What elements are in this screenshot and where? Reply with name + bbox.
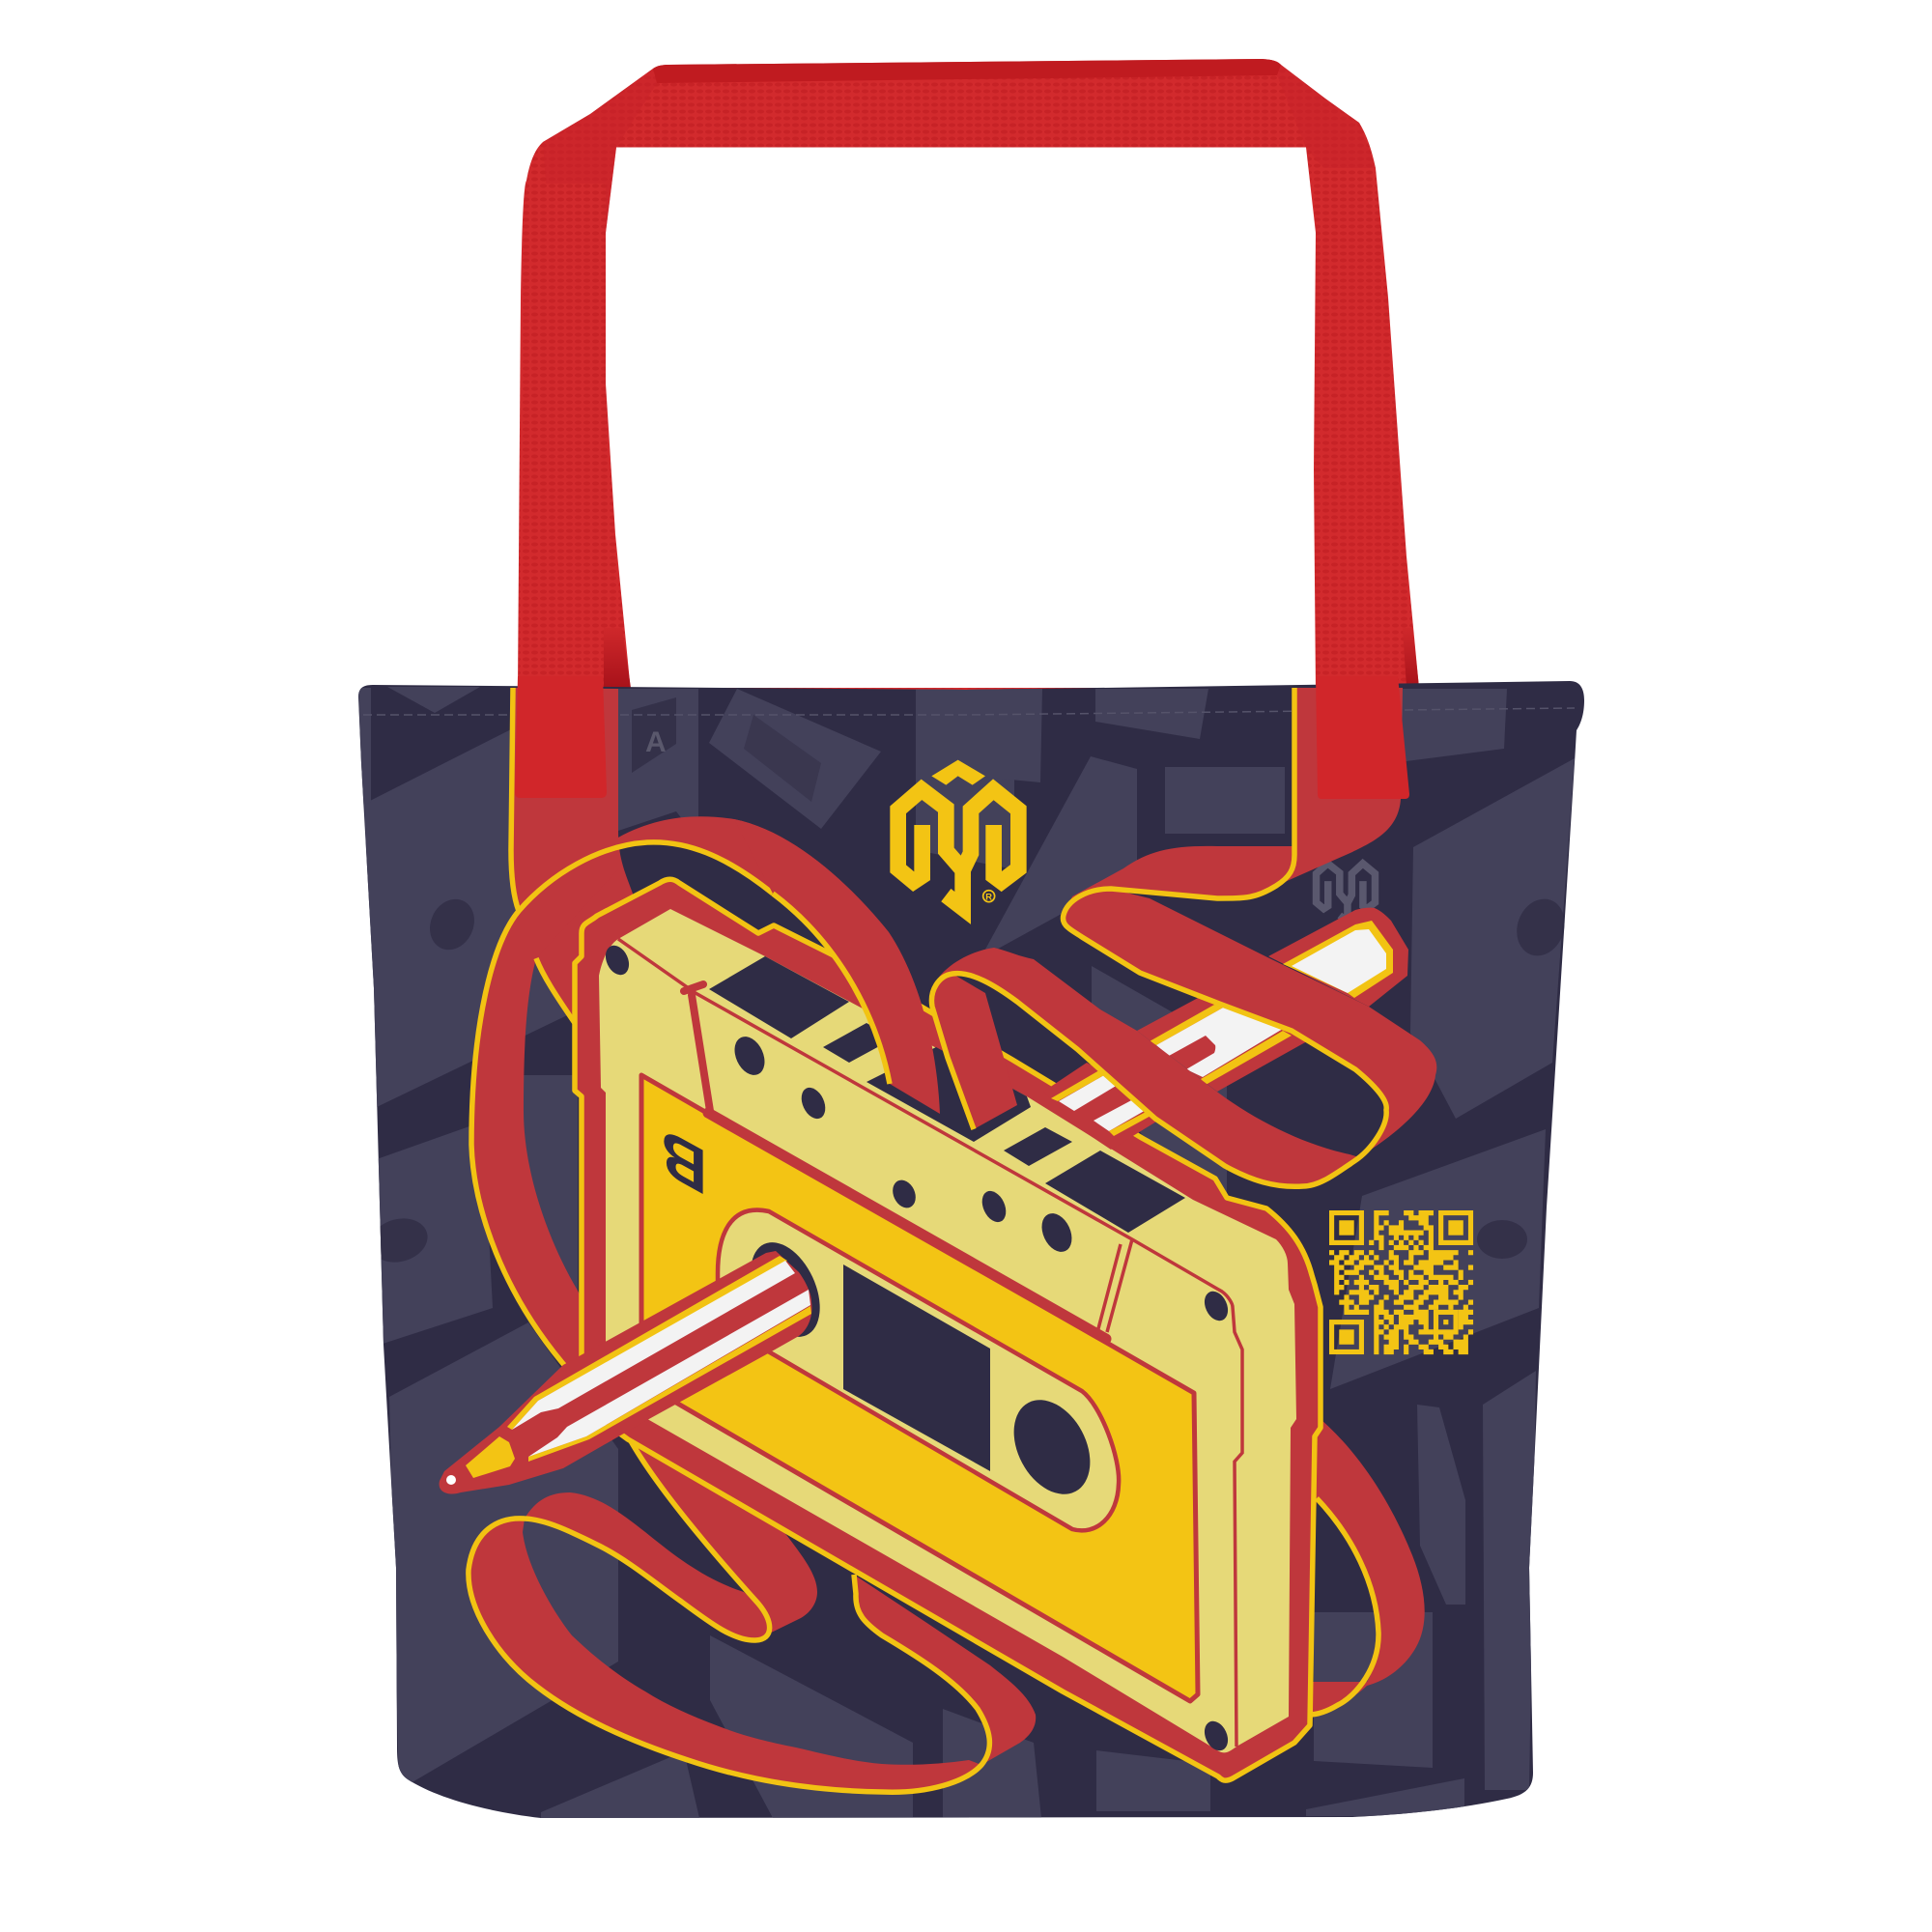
- inner strip into cassette: [931, 974, 1017, 1129]
- registered mark: R: [985, 892, 992, 901]
- yellow ribbon edge: [931, 688, 1386, 1186]
- tape viewing window: [843, 1264, 990, 1471]
- QR finder patterns: [1332, 1213, 1470, 1351]
- tape: yellow edges on left loop: [471, 688, 773, 1372]
- cassette inner red lines: [618, 939, 1242, 1747]
- right reel hole: [999, 1387, 1105, 1507]
- pencil tip: [466, 1436, 515, 1478]
- pencil point: [446, 1475, 456, 1485]
- label thick top edge: [708, 1113, 1106, 1339]
- pencil upper stripe: [507, 1256, 787, 1430]
- pencil end: [1268, 908, 1408, 1007]
- QR code: [1329, 1213, 1473, 1351]
- tape: yellow edges on lower bands: [469, 1439, 989, 1792]
- top windows: [709, 956, 1185, 1233]
- label window plate: [718, 1210, 1119, 1530]
- cassette notch left: [684, 984, 710, 1111]
- infographic: cassette tote bag: [358, 59, 1584, 1818]
- registered mark: [983, 891, 995, 902]
- cassette tape: [575, 879, 1321, 1780]
- tape: lower fold piece: [630, 1436, 817, 1640]
- QR data modules: [1329, 1213, 1473, 1351]
- diagonal band: [1064, 889, 1436, 1157]
- tape: arch passing in front of cassette: [734, 819, 940, 1114]
- cassette yellow label: [641, 1075, 1198, 1701]
- tape: lower right band: [854, 1575, 1036, 1765]
- pencil middle section: [1137, 997, 1307, 1092]
- tape: left strap: [511, 688, 676, 1063]
- cassette notch right: [1096, 1239, 1132, 1336]
- top hem stitching: [363, 708, 1575, 715]
- right tab: [1316, 676, 1409, 799]
- strap tabs stitched on bag: [515, 676, 1409, 799]
- tape: lower big band: [469, 1519, 981, 1792]
- QR finder centres: [1339, 1220, 1463, 1345]
- tape: large left loop and arch: [471, 816, 940, 1372]
- lower return band: [932, 948, 1359, 1186]
- pencil lower section: [1043, 1063, 1174, 1150]
- background cassette pattern: [358, 687, 1575, 1818]
- brand logo: [898, 760, 1018, 908]
- pattern label letter: A: [645, 726, 667, 758]
- cassette outer shell: [575, 879, 1321, 1780]
- tape: lower upper band: [525, 1492, 771, 1640]
- side letter B: B: [661, 1113, 707, 1209]
- pencil far end sections: [1043, 908, 1408, 1150]
- screw and peg holes: [601, 942, 1233, 1754]
- pencil lower stripe: [528, 1306, 811, 1462]
- handles: red webbing straps: [518, 59, 1419, 692]
- pencil through the reel: [440, 1251, 811, 1493]
- tote bag body: [358, 681, 1584, 1818]
- cassette pale body: [599, 909, 1296, 1752]
- left reel hole: [737, 1232, 834, 1348]
- tape: ribbon behind the cassette: [469, 688, 1425, 1792]
- pencil barrel: [440, 1251, 811, 1493]
- tape: S ribbon in front of pencil: [931, 688, 1436, 1186]
- faint watermark logo: [1317, 864, 1375, 922]
- left tab: [515, 676, 607, 798]
- pattern details: [365, 697, 1573, 1268]
- strap and fold: [1063, 688, 1403, 918]
- tape: right side loop: [1309, 1414, 1425, 1715]
